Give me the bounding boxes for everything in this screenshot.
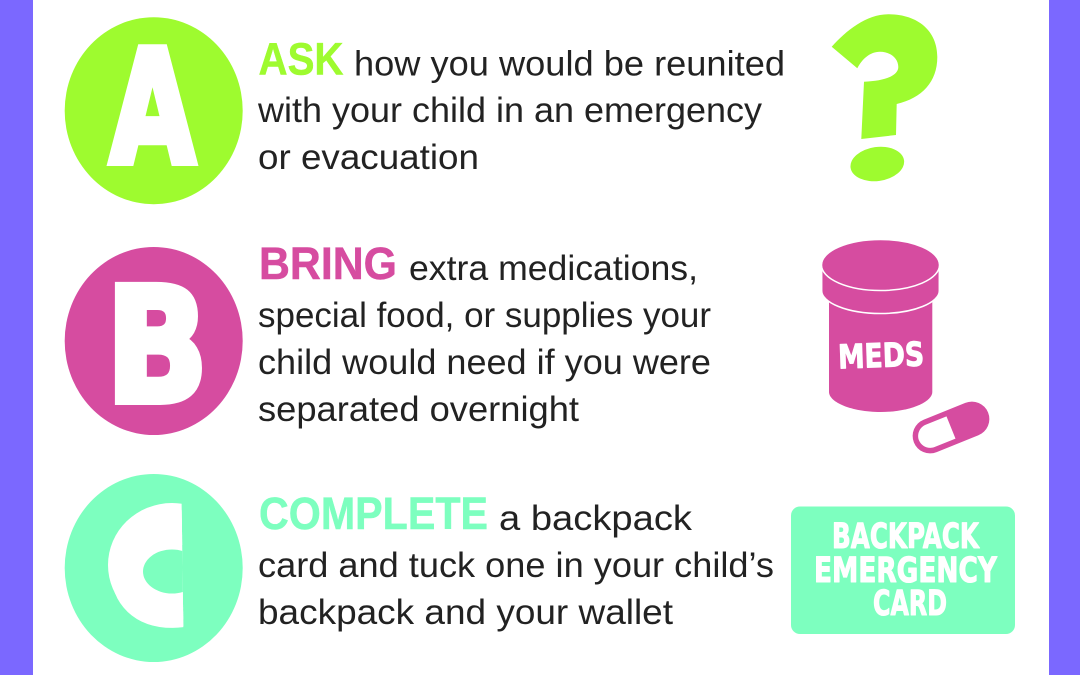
text block: bring bbox=[258, 238, 711, 429]
text block: complete bbox=[258, 488, 774, 632]
badge: letter B bbox=[65, 247, 243, 439]
text block: ask: with your child in an emergency bbox=[257, 91, 763, 130]
icon: backpack emergency card: BACKPACK bbox=[832, 517, 980, 557]
text block: bring: extra medications, bbox=[409, 249, 698, 288]
icon: backpack emergency card: CARD bbox=[873, 584, 947, 624]
text block: bring: separated overnight bbox=[258, 390, 579, 429]
badge: letter A bbox=[65, 17, 243, 204]
icon: backpack emergency card: EMERGENCY bbox=[814, 551, 997, 591]
pill bbox=[907, 396, 995, 459]
left purple border bbox=[0, 0, 33, 675]
text block: bring: BRING bbox=[259, 238, 397, 289]
bottle label: MEDS bbox=[837, 334, 925, 376]
right purple border bbox=[1049, 0, 1080, 675]
icon: backpack emergency card bbox=[791, 506, 1015, 634]
text block: bring: special food, or supplies your bbox=[258, 296, 711, 335]
text block: ask: how you would be reunited bbox=[354, 44, 785, 84]
text block: complete: COMPLETE bbox=[259, 488, 488, 539]
text block: complete: a backpack bbox=[499, 499, 693, 538]
badge: letter C: C bbox=[112, 493, 212, 650]
badge: letter B: B bbox=[106, 255, 208, 439]
text block: ask bbox=[257, 34, 785, 177]
text block: bring: child would need if you were bbox=[258, 343, 711, 382]
text block: complete: backpack and your wallet bbox=[258, 593, 673, 632]
badge: letter A: A bbox=[110, 17, 195, 199]
icon: question mark bbox=[832, 14, 937, 185]
text block: ask: ASK bbox=[258, 34, 344, 84]
text block: ask: or evacuation bbox=[258, 138, 479, 177]
badge: letter C bbox=[65, 474, 243, 662]
text block: complete: card and tuck one in your child’s bbox=[258, 546, 774, 585]
bottle bbox=[822, 240, 940, 412]
icon: medicine bottle and pill bbox=[822, 240, 995, 459]
